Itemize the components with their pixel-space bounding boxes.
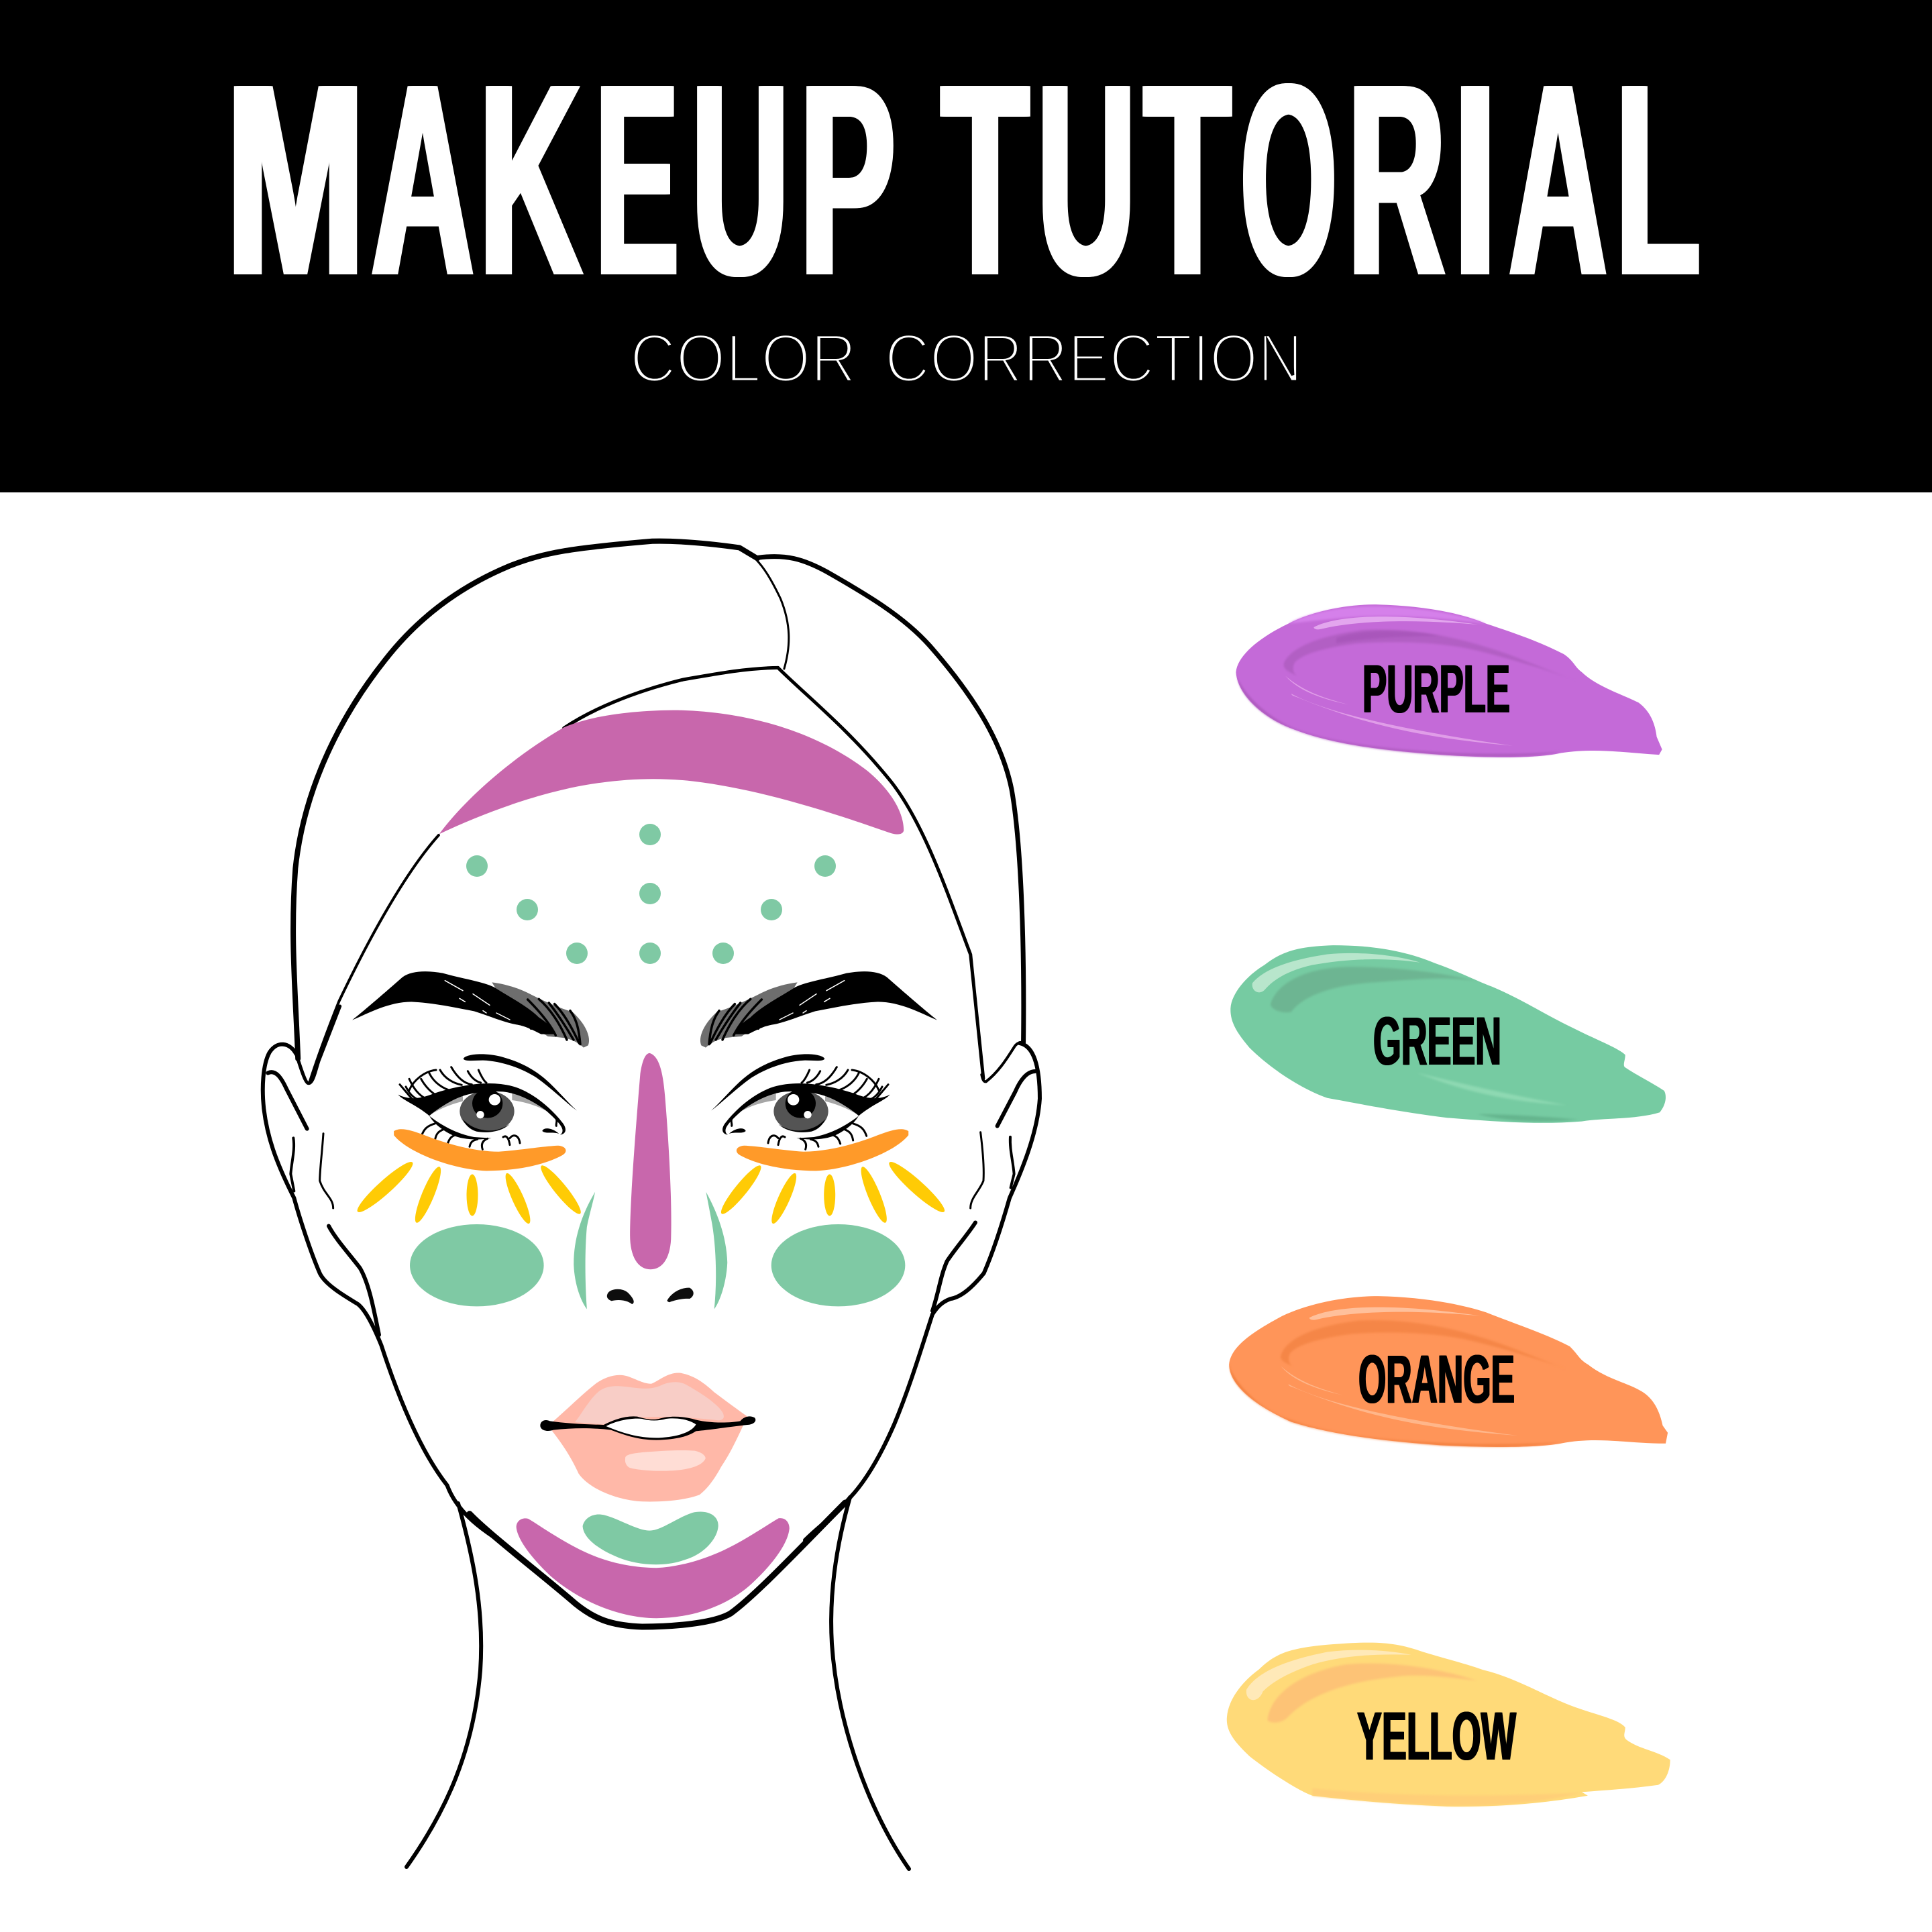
title: O bbox=[1240, 28, 1337, 333]
title: R bbox=[1348, 28, 1446, 333]
label: green: GREEN bbox=[1373, 1003, 1501, 1079]
header band bbox=[0, 0, 1932, 492]
title: U bbox=[692, 28, 789, 333]
purple nose stripe bbox=[630, 1053, 672, 1269]
swatch: yellow bbox=[1227, 1643, 1670, 1807]
label: yellow: YELLOW bbox=[1357, 1698, 1516, 1774]
face illustration bbox=[263, 541, 1040, 1869]
neck bbox=[407, 1497, 909, 1869]
green cheek ovals bbox=[410, 1224, 905, 1306]
hair outline bbox=[293, 541, 1024, 1083]
orange under-eye correctors bbox=[394, 1129, 908, 1171]
title: T bbox=[941, 28, 1029, 333]
mid-face correctors bbox=[394, 1053, 908, 1309]
title: I bbox=[1454, 28, 1497, 333]
title: A bbox=[1509, 28, 1607, 333]
purple forehead correction bbox=[439, 710, 904, 835]
title: E bbox=[595, 28, 679, 333]
swatch: purple bbox=[1236, 604, 1662, 757]
green chin correction bbox=[583, 1512, 718, 1564]
lips and chin bbox=[517, 1373, 790, 1618]
yellow cheek rays bbox=[353, 1157, 949, 1226]
title: T bbox=[1144, 28, 1231, 333]
title: L bbox=[1615, 28, 1701, 333]
title: A bbox=[371, 28, 474, 333]
right ear and jaw bbox=[805, 1042, 1040, 1540]
left eye bbox=[398, 1054, 577, 1149]
green nose side strips bbox=[574, 1192, 727, 1309]
label: purple: PURPLE bbox=[1362, 651, 1510, 727]
chin line bbox=[470, 1503, 845, 1627]
subtitle: CORRECTION bbox=[885, 320, 1303, 396]
title: M bbox=[226, 28, 365, 333]
label: orange: ORANGE bbox=[1358, 1341, 1515, 1417]
nostrils bbox=[607, 1288, 694, 1304]
subtitle: COLOR bbox=[630, 320, 857, 396]
title: K bbox=[479, 28, 582, 333]
right eye bbox=[711, 1054, 890, 1149]
left eyebrow bbox=[352, 971, 589, 1048]
title: U bbox=[1037, 28, 1136, 333]
left ear and jaw bbox=[263, 1006, 503, 1543]
purple jaw correction bbox=[517, 1518, 790, 1618]
swatch: green bbox=[1230, 945, 1666, 1123]
right eyebrow bbox=[700, 971, 937, 1048]
title: P bbox=[800, 28, 893, 333]
lips bbox=[540, 1373, 755, 1502]
swatch: orange bbox=[1229, 1296, 1668, 1447]
green forehead dots bbox=[466, 824, 836, 964]
